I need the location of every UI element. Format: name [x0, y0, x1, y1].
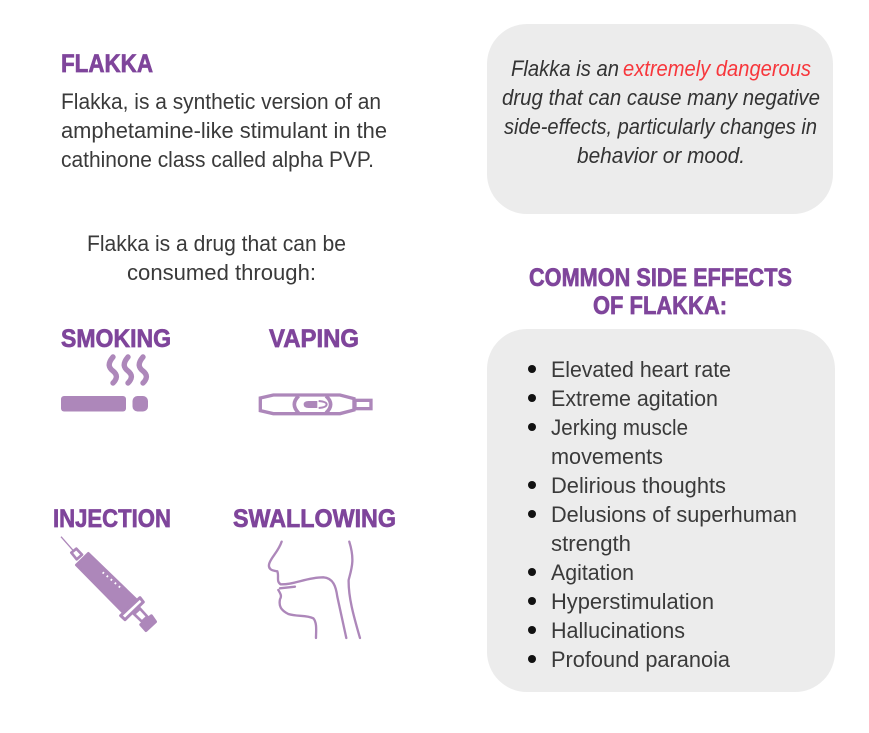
- icon: cigarette with smoke: [61, 357, 148, 412]
- panel: side effects list: [487, 329, 835, 692]
- label: smoking: SMOKING: [61, 325, 171, 353]
- panel: side effects list: Delusions of superhuman: [551, 502, 797, 527]
- text block: Flakka description: cathinone class called alpha PVP.: [61, 147, 374, 172]
- heading: common side effects: OF FLAKKA:: [593, 292, 727, 320]
- label: vaping: VAPING: [269, 325, 359, 353]
- panel: danger warning: Flakka is an: [511, 56, 619, 81]
- panel: danger warning: extremely dangerous: [623, 56, 811, 81]
- panel: side effects list: Jerking muscle: [551, 415, 688, 440]
- panel: danger warning: behavior or mood.: [577, 143, 745, 168]
- icon: vape pen: [260, 395, 371, 414]
- text block: Flakka description: Flakka, is a synthetic version of an: [61, 89, 381, 114]
- panel: danger warning: side-effects, particularly changes in: [504, 114, 817, 139]
- label: swallowing: SWALLOWING: [233, 505, 396, 533]
- heading: common side effects: COMMON SIDE EFFECTS: [529, 264, 792, 292]
- icon: throat profile: [269, 542, 360, 638]
- panel: side effects list: Profound paranoia: [551, 647, 731, 672]
- panel: side effects list: Elevated heart rate: [551, 357, 731, 382]
- text block: consumption intro: Flakka is a drug that can be: [87, 231, 346, 256]
- panel: danger warning: [487, 24, 833, 214]
- heading: Flakka: FLAKKA: [61, 50, 153, 78]
- heading: common side effects: [529, 264, 792, 320]
- bullets: [528, 365, 536, 663]
- label: injection: INJECTION: [53, 505, 171, 533]
- panel: danger warning: drug that can cause many negative: [502, 85, 820, 110]
- panel: side effects list: movements: [551, 444, 663, 469]
- panel: side effects list: Extreme agitation: [551, 386, 718, 411]
- panel: side effects list: Agitation: [551, 560, 634, 585]
- text block: Flakka description: amphetamine-like stimulant in the: [61, 118, 387, 143]
- panel: side effects list: Hyperstimulation: [551, 589, 714, 614]
- text block: consumption intro: [87, 231, 346, 285]
- icon: syringe: [61, 537, 155, 630]
- panel: side effects list: Delirious thoughts: [551, 473, 726, 498]
- panel: side effects list: strength: [551, 531, 631, 556]
- panel: side effects list: Hallucinations: [551, 618, 685, 643]
- text block: Flakka description: [61, 89, 387, 172]
- text block: consumption intro: consumed through:: [127, 260, 316, 285]
